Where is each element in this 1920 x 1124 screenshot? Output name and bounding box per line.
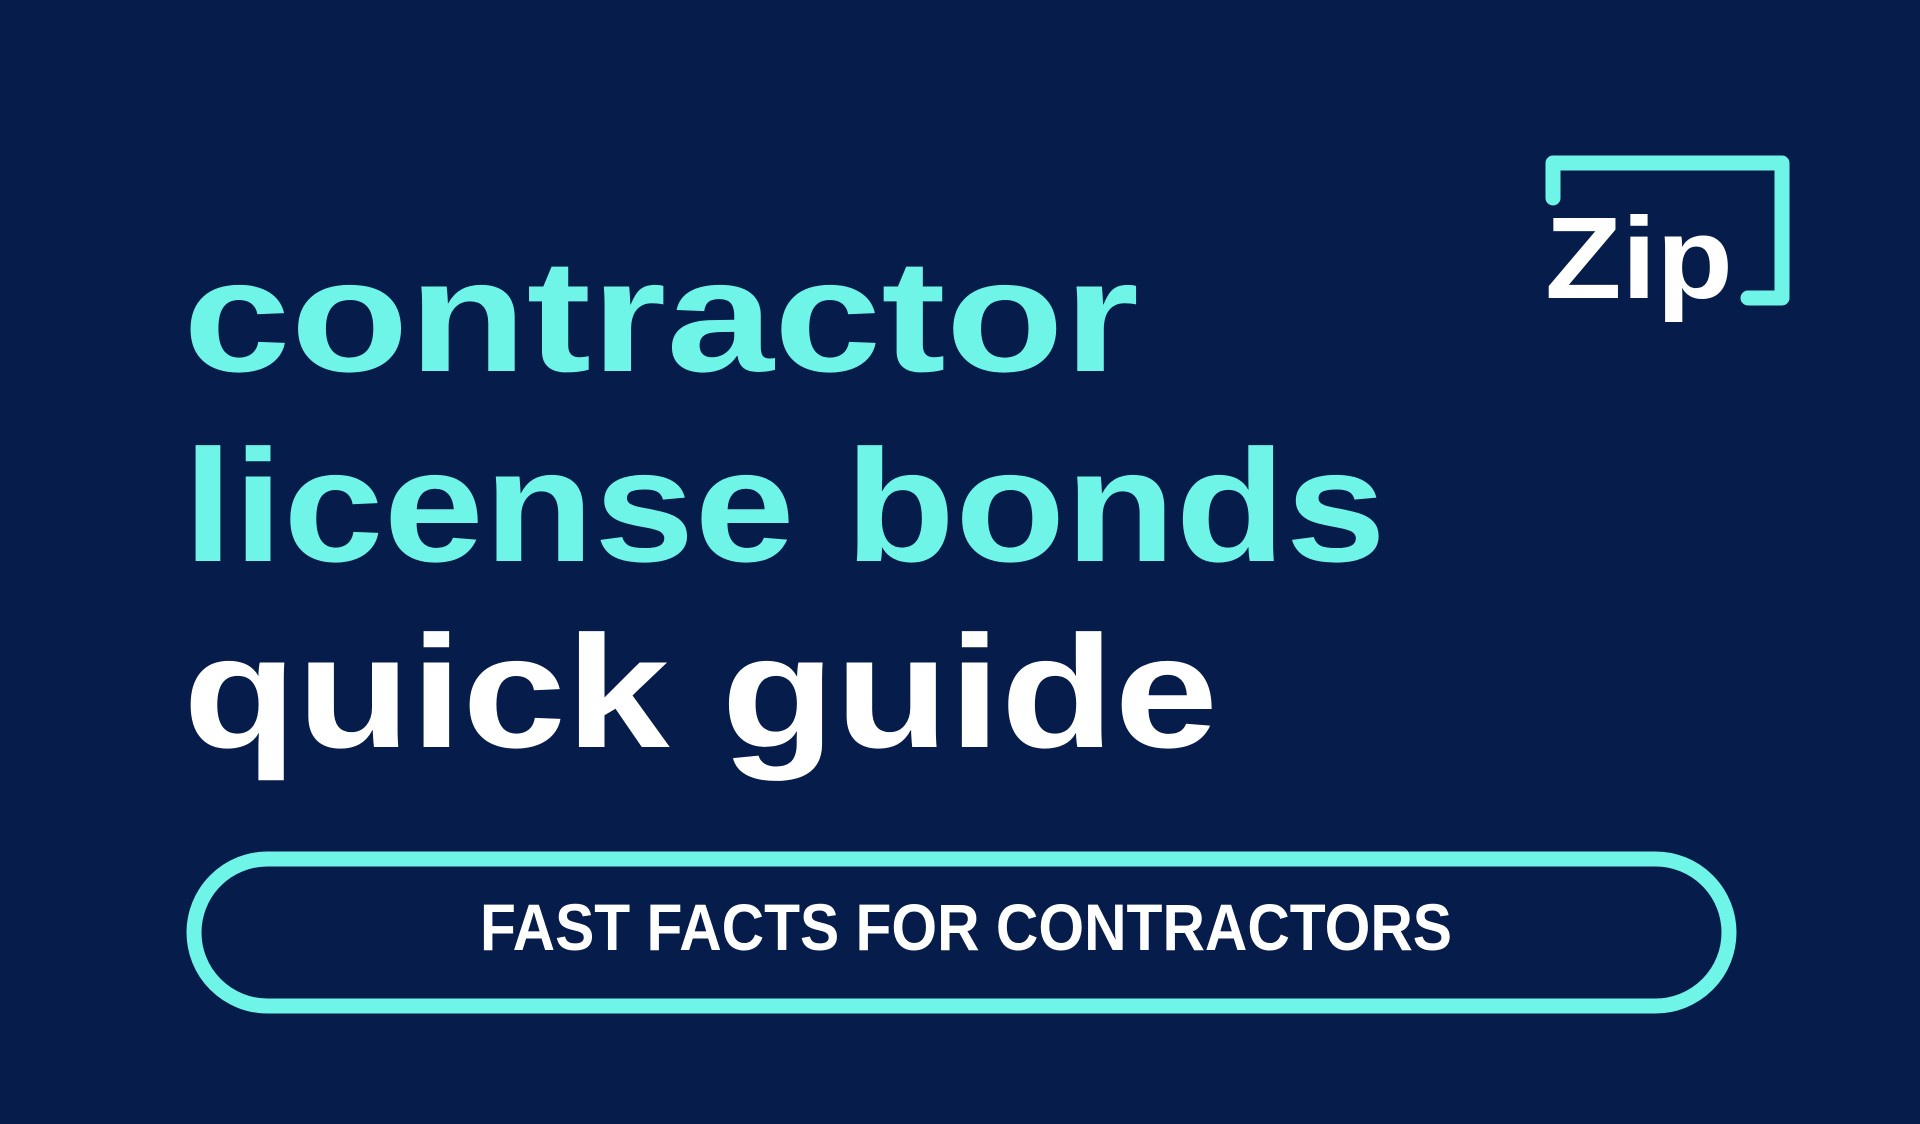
title: contractor — [183, 226, 1139, 405]
title: license bonds — [183, 416, 1386, 595]
logo: Zip: Zip — [1545, 193, 1733, 323]
pill: fast facts — [194, 859, 1729, 1006]
title: quick guide — [183, 602, 1218, 781]
title — [183, 226, 1386, 781]
logo: Zip — [1545, 163, 1782, 323]
pill: fast facts: FAST FACTS FOR CONTRACTORS — [480, 890, 1452, 964]
